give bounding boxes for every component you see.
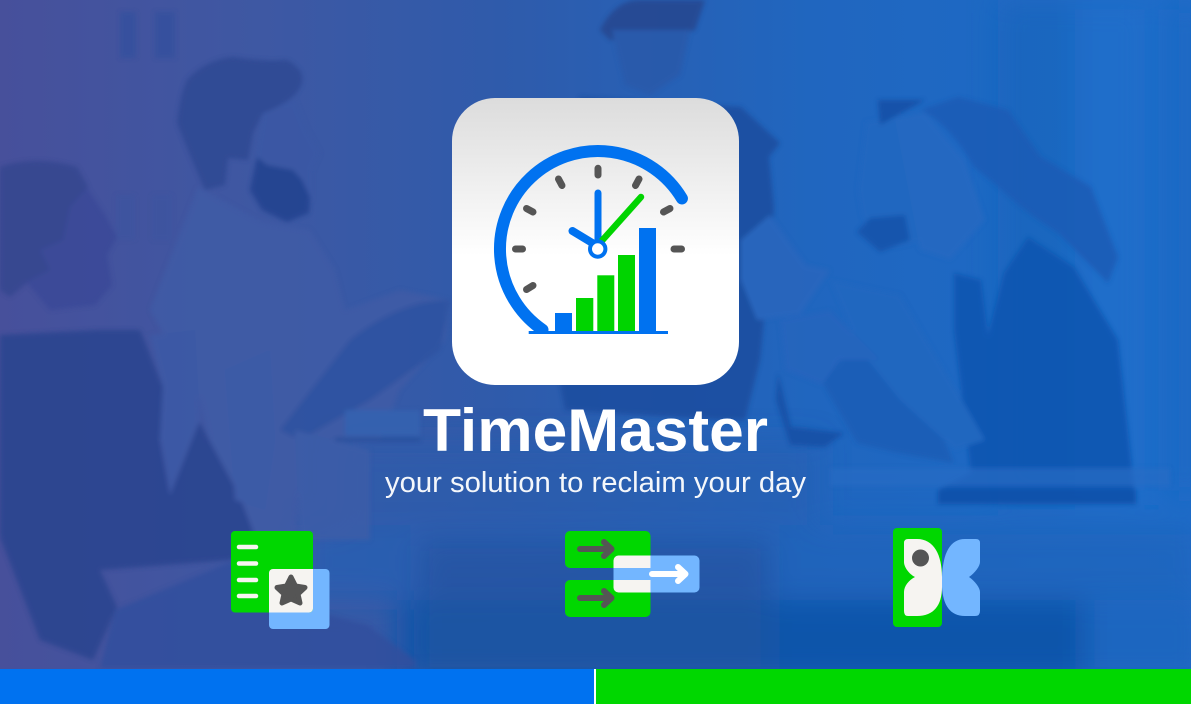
bearded man shirt: [150, 187, 450, 560]
raised arm and trousers: [150, 330, 200, 495]
keyboard: [938, 490, 1136, 504]
bearded man face: [255, 100, 320, 210]
woman left: [25, 185, 117, 310]
bar chart: [529, 228, 668, 334]
icon: prioritised list with star: [231, 531, 330, 629]
tagline: your solution to reclaim your day: [385, 467, 807, 499]
clock ring: [500, 151, 682, 330]
footer bar: green: [596, 669, 1191, 704]
woman sweater: [0, 330, 260, 660]
clock hands: [572, 193, 641, 257]
sleeve and arms: [822, 350, 954, 463]
icon: focus butterfly: [893, 528, 980, 627]
windows: [120, 12, 136, 58]
bearded man hair: [177, 57, 302, 190]
right man: [858, 112, 925, 250]
footer divider: [594, 669, 596, 704]
right woman hair: [921, 97, 1118, 283]
clock tick marks: [516, 168, 682, 290]
footer bar: blue: [0, 669, 594, 704]
icon: merging task arrows: [565, 531, 700, 617]
table objects: [345, 410, 420, 436]
centre woman: [600, 0, 705, 40]
beard: [250, 157, 310, 222]
title: TimeMaster: [423, 397, 768, 464]
app icon card: [452, 98, 739, 385]
right woman sweater: [938, 237, 1136, 503]
